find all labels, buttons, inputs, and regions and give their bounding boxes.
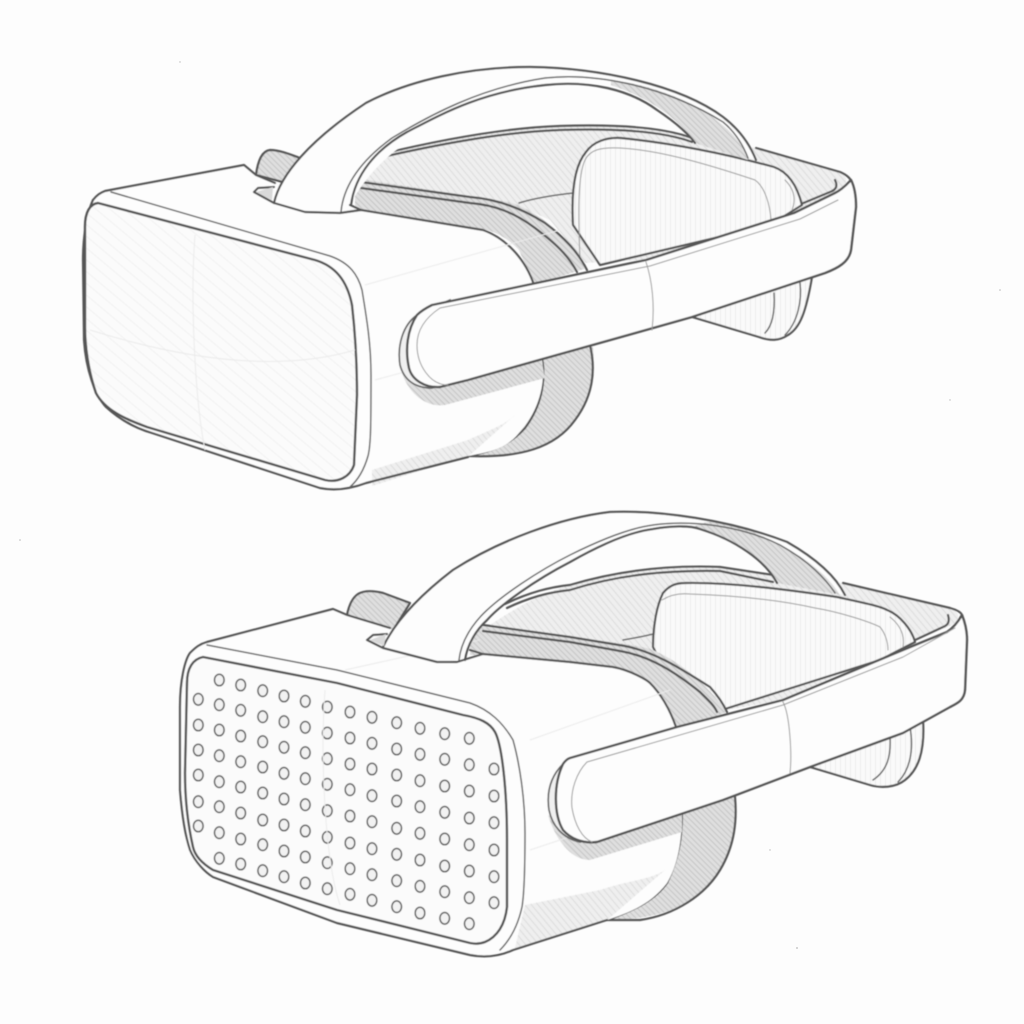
visor face panel <box>85 203 357 481</box>
headband <box>274 67 756 213</box>
rear ear pad inner lines <box>579 148 794 260</box>
headset: bottom, perforated front visor <box>180 512 967 957</box>
strap highlight and seam <box>572 628 955 842</box>
body face and outer contour <box>83 200 468 489</box>
notch shade <box>256 187 273 200</box>
perforated visor face panel <box>185 657 507 944</box>
facial gasket lower <box>607 795 736 920</box>
strap highlight line and seam <box>417 200 838 385</box>
body outline <box>180 609 676 956</box>
headset: top, plain front visor <box>83 67 856 490</box>
headband outlines <box>274 67 756 203</box>
rear interior of head strap <box>490 567 958 710</box>
headband <box>383 512 845 662</box>
body of visor <box>180 609 682 957</box>
body lower hatching <box>372 415 515 486</box>
facial gasket lower lines <box>607 797 736 920</box>
headband outer edge <box>383 512 845 647</box>
body outlines <box>93 165 534 285</box>
rear ear pad <box>573 138 802 265</box>
construction lines <box>323 640 680 905</box>
body lower hatching <box>515 870 665 948</box>
headband inner edges <box>351 84 695 205</box>
connector inside rear <box>623 634 653 640</box>
side strap holder ring <box>548 755 625 842</box>
facial gasket band upper <box>355 178 587 285</box>
facial gasket lines <box>483 625 727 712</box>
facial gasket lower <box>468 340 594 457</box>
rear ear pad lower part <box>810 720 923 787</box>
rear ear pad <box>653 583 915 720</box>
nose nub behind body <box>347 591 410 632</box>
facial gasket band upper <box>470 625 727 730</box>
facial gasket lower lines <box>468 345 593 456</box>
headband inner edges <box>465 526 777 660</box>
rear rim lines <box>369 126 852 209</box>
headband inner second line <box>459 523 835 660</box>
body of visor <box>83 165 543 490</box>
headband inner edge second line <box>341 77 748 212</box>
headband shade band <box>611 80 748 160</box>
rear ear pad lower inner lines <box>873 727 912 782</box>
connector inside rear <box>519 193 573 203</box>
rear rim lines <box>505 567 962 640</box>
nose nub behind body <box>256 150 300 184</box>
rear ear pad, lower inner lines <box>765 283 800 335</box>
side strap <box>407 180 856 387</box>
headband shade band <box>693 522 840 595</box>
body shadow under strap <box>548 810 682 860</box>
rear interior of head strap <box>361 126 846 263</box>
face bezel <box>111 192 371 487</box>
top bezel line <box>207 645 525 950</box>
rear ear pad, lower part <box>692 277 812 340</box>
top notch <box>367 634 483 662</box>
side strap <box>556 615 967 842</box>
construction lines <box>90 230 560 450</box>
side strap holder ring <box>399 300 470 388</box>
notch shade <box>370 634 386 646</box>
body shadow under strap <box>402 352 545 405</box>
rear ear pad inner lines <box>662 594 903 650</box>
dot perforation grid <box>194 674 499 930</box>
top notch <box>254 187 361 213</box>
facial gasket lines <box>361 182 587 272</box>
